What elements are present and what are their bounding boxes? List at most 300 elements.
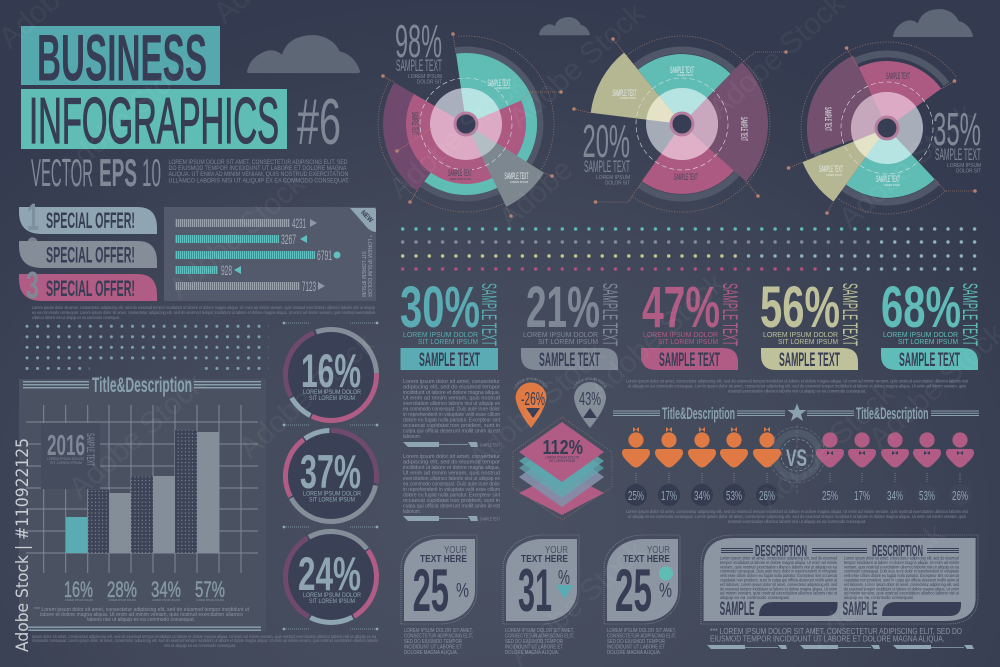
segment labels: LOREM IPSUM <box>884 183 900 187</box>
description column 1 <box>720 556 838 600</box>
description column 2: aliquip ex ea commodo consequat. <box>844 595 914 600</box>
subtitle: EPS <box>99 152 137 195</box>
icon: cloud left <box>247 35 360 73</box>
stat 56%: LOREM IPSUM DOLOR <box>763 332 838 339</box>
vertical note: SIT LOREM IPSUM <box>360 251 366 297</box>
chart note: labore et dolore magna aliqua. Ut enim ad minim veniam, quis nostrud exercitation ullamco <box>40 612 243 618</box>
comparison text top <box>626 378 968 394</box>
small text strip bottom: commodo consequat. Lorem ipsum dolor sit amet, consectetur adipiscing elit, sed do eiusmod tempor incididunt ut labore et dolore magna aliqua. Ut enim ad minim veniam, quis nostrud exercitation ullamco laboris <box>32 638 379 643</box>
watermarks: Adobe Stock <box>803 516 952 655</box>
paragraph 1: in reprehenderit in voluptate velit esse cillum <box>403 412 500 418</box>
35% label: LOREM IPSUM <box>947 163 981 169</box>
heading row <box>613 404 979 423</box>
description column 1: aliquip ex ea commodo consequat. <box>720 595 790 600</box>
20% label <box>582 115 631 186</box>
figure connectors <box>636 473 960 483</box>
paragraph 2 <box>403 454 500 515</box>
dot rows <box>401 224 980 274</box>
description column 2: veniam, quis nostrud exercitation ullamco laboris nisi ut aliquip ex ea <box>844 564 959 569</box>
rose chart 98%: SAMPLE TEXT <box>396 56 442 75</box>
card caption: LOREM IPSUM DOLOR SIT AMET, <box>404 628 473 634</box>
rose chart 20% <box>572 20 788 228</box>
donut 16%: 16% <box>301 344 361 397</box>
panel: bar list <box>164 207 376 301</box>
percentage badges: 26% <box>759 488 775 503</box>
stat 21%: SIT LOREM IPSUM <box>538 339 598 346</box>
figure 5 <box>946 432 974 468</box>
watermarks: Adobe Stock <box>753 376 902 515</box>
description column 2: tempor incididunt ut labore et dolore magna aliqua. Ut enim ad minim <box>844 560 959 565</box>
rose chart 98% <box>378 15 563 218</box>
donut 37% <box>268 413 394 539</box>
percentage badges <box>625 484 971 506</box>
percentage badges: 53% <box>726 488 742 503</box>
bar labels: 16% <box>64 577 93 602</box>
banner 2: SPECIAL OFFER! <box>46 242 135 268</box>
description column 1: tempor incididunt ut labore et dolore magna aliqua. Ut enim ad minim <box>720 560 837 565</box>
layered diamond 112%: LOREM IPSUM DOLOR <box>545 456 579 460</box>
title: business: BUSINESS <box>37 20 207 94</box>
paragraph 2: Ut enim ad minim veniam, quis nostrud <box>403 470 500 476</box>
bar labels: LOREM IPSUM DOLOR <box>196 598 224 602</box>
year label: SIT LOREM IPSUM <box>50 461 82 465</box>
percentage badges: 17% <box>854 488 870 503</box>
banner 3: 3 <box>26 265 39 307</box>
stat 47%: 47% <box>642 275 720 340</box>
watermarks: Adobe Stock <box>833 96 982 235</box>
paragraph 1: exercitation ullamco laboris nisi ut aliquip ex <box>403 401 500 407</box>
clouds <box>247 9 973 73</box>
donut 24%: 24% <box>298 547 361 600</box>
vertical note <box>360 235 372 297</box>
segment labels: LOREM IPSUM DOLOR <box>449 177 472 181</box>
figure 1 <box>816 432 844 468</box>
donut connectors <box>283 322 378 630</box>
year label <box>41 423 100 489</box>
description column 1: cupidatat non proident, sunt in culpa qui officia deserunt mollit anim id <box>720 578 837 582</box>
title: business <box>21 20 220 94</box>
bar 3267: 3267 <box>281 231 296 247</box>
bar labels <box>64 577 225 602</box>
stat 68%: SIT LOREM IPSUM <box>898 339 958 346</box>
comparison text bottom: nostrud exercitation ullamco laboris nisi ut aliquip ex ea commodo consequat. <box>728 519 866 525</box>
paragraph 1: occaecat cupidatat non proident, sunt in <box>403 423 500 429</box>
icon: cloud right <box>893 9 973 37</box>
orange figures <box>622 427 781 468</box>
donut 16%: LOREM IPSUM DOLOR <box>303 390 362 396</box>
segment labels: SAMPLE TEXT <box>670 65 694 75</box>
rose chart 35%: SAMPLE TEXT <box>886 71 910 81</box>
banner 1: SPECIAL OFFER! <box>46 208 135 233</box>
description column 1: do eiusmod tempor incididunt ut labore et dolore magna aliqua. Ut enim <box>720 586 837 591</box>
VS badge <box>765 425 829 495</box>
card 31% <box>503 535 579 656</box>
card caption: SED DO EIUSMOD TEMPOR <box>505 639 563 645</box>
paragraph 2: laborum. <box>403 509 421 515</box>
segment labels: SAMPLE TEXT <box>823 107 833 131</box>
stat 47%: LOREM IPSUM DOLOR <box>643 332 718 339</box>
paragraph 1: dolore eu fugiat nulla pariatur. Excepteur sint <box>403 418 500 424</box>
divider 1: SAMPLE TEXT <box>480 442 500 448</box>
segment labels: LOREM IPSUM <box>510 180 528 184</box>
description column 2: Lorem ipsum dolor sit amet, consectetur adipiscing elit, sed do eiusmod <box>844 556 959 560</box>
35% label: DOLOR SIT <box>956 168 982 174</box>
figure 3 <box>688 427 716 468</box>
chart note: laboris nisi ut aliquip ex ea commodo consequat. <box>87 617 195 623</box>
segment labels <box>612 65 749 182</box>
bar 4231: 4231 <box>292 215 306 231</box>
card caption: INCIDIDUNT UT LABORE ET <box>505 644 564 650</box>
segment labels: SAMPLE TEXT <box>612 88 637 98</box>
paragraph 1: Lorem ipsum dolor sit amet, consectetur <box>403 379 500 385</box>
sample label 2 <box>842 599 961 620</box>
description headings <box>721 543 959 560</box>
card 25% with dot: YOUR <box>647 545 670 556</box>
stat 47% <box>641 275 741 371</box>
title: infographics: INFOGRAPHICS <box>29 84 279 157</box>
stat 30%: SAMPLE TEXT <box>477 283 500 346</box>
small text strip bottom: ipsum dolor sit amet, consectetur adipiscing elit, sed do eiusmod tempor incididunt ut labore et dolore magna aliqua. Ut enim ad minim veniam, quis nostrud exercitation ullamco laboris nisi ut aliquip ex ea <box>32 634 376 639</box>
bar 928 <box>175 262 241 278</box>
bar 3267 <box>175 231 307 247</box>
intro text: ALIQUA. UT ENIM AD MINIM VENIAM, QUIS NOSTRUD EXERCITATION <box>168 171 348 178</box>
stat 30% <box>400 275 500 371</box>
panel: bar chart <box>19 374 266 631</box>
heading right <box>807 405 979 423</box>
card 25% with dot: % <box>659 580 672 602</box>
stat 56%: SIT LOREM IPSUM <box>778 339 838 346</box>
segment labels: LOREM IPSUM <box>494 86 510 90</box>
small text strip: ex ea commodo consequat. Lorem ipsum dolor sit amet, consectetur adipiscing elit, sed do eiusmod tempor incididunt ut labore et dolore magna aliqua. Ut enim ad minim veniam, quis nostrud exercitation <box>32 310 375 315</box>
percentage badges: 25% <box>628 488 644 503</box>
new corner tag <box>350 208 376 232</box>
watermarks: Adobe Stock <box>583 266 732 405</box>
pin -26% <box>514 378 548 428</box>
card caption: DOLORE MAGNA ALIQUA. <box>607 650 661 656</box>
banner 2: 2 <box>26 231 39 273</box>
card 25%: YOUR <box>444 545 467 556</box>
description column 2: velit esse cillum dolore eu fugiat nulla pariatur. Excepteur sint occaecat <box>844 573 960 578</box>
banner 3: SPECIAL OFFER! <box>46 276 135 301</box>
figure 4 <box>913 432 941 468</box>
leaders <box>788 48 975 213</box>
35% label <box>933 103 982 174</box>
small text strip: Lorem ipsum dolor sit amet, consectetur adipiscing elit, sed do eiusmod tempor incididunt ut labore et dolore magna aliqua. Ut enim ad minim veniam, quis nostrud exercitation ullamco laboris nisi ut aliquip <box>32 305 375 310</box>
rose chart 98%: SAMPLE TEXT <box>504 171 529 181</box>
vertical note: * LOREM IPSUM DOLOR <box>366 235 372 297</box>
stat 30%: LOREM IPSUM DOLOR <box>403 332 478 339</box>
description column 2: ad minim veniam, quis nostrud exercitation ullamco laboris nisi ut <box>844 591 960 596</box>
figure 1 <box>622 427 650 468</box>
stat 21%: SAMPLE TEXT <box>539 350 600 371</box>
stat 21% <box>521 275 621 371</box>
watermarks: Adobe Stock <box>503 0 652 135</box>
stat 68%: SAMPLE TEXT <box>958 283 981 346</box>
banner 1: 1 <box>27 197 39 239</box>
description column 1: commodo consequat. Duis aute irure dolor in reprehenderit in voluptate <box>720 569 837 574</box>
segment labels: SAMPLE TEXT <box>488 78 511 88</box>
stat 21%: 21% <box>526 275 600 340</box>
bar 6791 <box>175 247 340 263</box>
leaders <box>574 39 786 202</box>
pin -26%: LOREM IPSUM DOLOR SIT AMET <box>514 378 548 389</box>
bar labels: 28% <box>107 577 137 602</box>
percentage badges: 25% <box>822 488 838 503</box>
small text strip <box>32 305 375 320</box>
donut 37%: 37% <box>300 445 361 498</box>
paragraph 1: culpa qui officia deserunt mollit anim id est <box>403 428 500 434</box>
bar 7123 <box>175 278 325 294</box>
description column 1: velit esse cillum dolore eu fugiat nulla pariatur. Excepteur sint occaecat <box>720 573 838 578</box>
footer note: EIUSMOD TEMPOR INCIDIDUNT UT LABORE ET DOLORE MAGNA ALIQUA. <box>710 634 944 644</box>
segment labels <box>410 78 529 184</box>
VS badge: VS <box>786 445 807 472</box>
description column 1: ad minim veniam, quis nostrud exercitation ullamco laboris nisi ut <box>720 591 838 596</box>
paragraph 1 <box>403 379 500 440</box>
paragraph 2: ea commodo consequat. Duis aute irure dolor <box>403 482 500 488</box>
donut 16%: SIT LOREM IPSUM <box>309 396 355 402</box>
watermarks: Adobe Stock <box>163 166 312 305</box>
left text column <box>403 379 500 522</box>
chart note: *** Lorem ipsum dolor sit amet, consectetur adipiscing elit, sed do eiusmod tempor incididunt ut <box>34 607 249 613</box>
98% label: DOLOR SIT <box>417 80 443 86</box>
stat 30%: SIT LOREM IPSUM <box>418 339 478 346</box>
20% label: LOREM IPSUM <box>596 175 630 181</box>
card caption: CONSECTETUR ADIPISCING ELIT, <box>607 634 676 640</box>
paragraph 1: incididunt ut labore et dolore magna aliqua. <box>403 390 500 396</box>
paragraph 2: in reprehenderit in voluptate velit esse cillum <box>403 487 500 493</box>
rose chart 35% <box>782 23 992 233</box>
donut 24% <box>267 513 395 641</box>
intro text: LOREM IPSUM DOLOR SIT AMET, CONSECTETUR ADIPISCING ELIT, SED <box>168 159 348 166</box>
paragraph 2: culpa qui officia deserunt mollit anim id est <box>403 504 500 510</box>
card caption: SED DO EIUSMOD TEMPOR <box>607 639 665 645</box>
card 25% with dot: 25 <box>615 557 652 624</box>
card caption: DOLORE MAGNA ALIQUA. <box>505 650 559 656</box>
segment labels: SAMPLE TEXT <box>410 112 420 135</box>
description headings: DESCRIPTION <box>755 543 807 560</box>
description column 2: est laborum. Lorem ipsum dolor sit amet, consectetur adipiscing elit, sed <box>844 582 959 587</box>
intro text <box>168 159 350 184</box>
segment labels: SAMPLE TEXT <box>674 172 698 182</box>
small text strip bottom: nisi ut aliquip ex ea commodo consequat. <box>164 643 236 648</box>
card caption: LOREM IPSUM DOLOR SIT AMET, <box>505 628 574 634</box>
divider 2 <box>403 516 500 522</box>
stock credit: Adobe Stock | #110922125 <box>13 438 33 652</box>
banner 3 <box>19 265 157 307</box>
percentage badges: 34% <box>887 488 903 503</box>
icon: cloud middle <box>539 17 590 35</box>
card caption: CONSECTETUR ADIPISCING ELIT, <box>404 634 473 640</box>
dot grid left <box>26 321 268 374</box>
bar 4231 <box>175 215 317 231</box>
watermarks: Adobe Stock <box>233 326 382 465</box>
card 25%: % <box>456 580 469 602</box>
card 31%: TEXT HERE <box>521 554 568 565</box>
footer dividers <box>707 645 974 649</box>
donut 24%: LOREM IPSUM DOLOR <box>303 593 362 599</box>
pin 43% <box>572 378 606 428</box>
stat 21%: LOREM IPSUM DOLOR <box>523 332 598 339</box>
magenta figures <box>816 432 974 468</box>
segment labels: LOREM IPSUM <box>826 173 842 177</box>
title block: 10 <box>142 152 161 195</box>
watermarks: Adobe Stock <box>463 336 612 475</box>
paragraph 2: adipiscing elit, sed do eiusmod tempor <box>403 460 500 466</box>
card caption: SED DO EIUSMOD TEMPOR <box>404 639 462 645</box>
stat 56% <box>760 275 861 371</box>
paragraph 2: Lorem ipsum dolor sit amet, consectetur <box>403 454 500 460</box>
description column 1: veniam, quis nostrud exercitation ullamco laboris nisi ut aliquip ex ea <box>720 564 837 569</box>
pin 43%: 43% <box>579 389 601 409</box>
card 25% <box>401 535 477 656</box>
figure 3 <box>881 432 909 468</box>
card caption: DOLORE MAGNA ALIQUA. <box>404 650 458 656</box>
percentage badges: 17% <box>661 488 677 503</box>
sample label 1 <box>720 599 838 620</box>
bar 928: 928 <box>221 262 232 278</box>
percentage badges: 26% <box>952 488 968 503</box>
card 25%: 25 <box>413 557 449 624</box>
card 25% with dot <box>604 535 680 656</box>
stat 56%: SAMPLE TEXT <box>838 283 861 346</box>
subtitle: VECTOR <box>31 152 93 195</box>
segment labels: SAMPLE TEXT <box>819 164 843 174</box>
card 25%: TEXT HERE <box>420 554 467 565</box>
card 25% with dot: TEXT HERE <box>623 554 670 565</box>
paragraph 2: occaecat cupidatat non proident, sunt in <box>403 498 500 504</box>
stat 56%: SAMPLE TEXT <box>779 350 840 371</box>
title number: #6 <box>297 85 341 158</box>
donut 24%: SIT LOREM IPSUM <box>309 599 355 605</box>
description column 2: do eiusmod tempor incididunt ut labore et dolore magna aliqua. Ut enim <box>844 586 959 591</box>
watermarks: Adobe Stock <box>53 46 202 185</box>
title block <box>21 20 350 195</box>
card caption: INCIDIDUNT UT LABORE ET <box>607 644 666 650</box>
sample label 1: SAMPLE <box>720 599 755 620</box>
paragraph 2: exercitation ullamco laboris nisi ut aliquip ex <box>403 476 500 482</box>
card caption: LOREM IPSUM DOLOR SIT AMET, <box>607 628 676 634</box>
banner 2 <box>19 231 157 273</box>
stat 56%: 56% <box>760 275 840 340</box>
stat 21%: SAMPLE TEXT <box>598 283 621 346</box>
paragraph 2: incididunt ut labore et dolore magna aliqua. <box>403 465 500 471</box>
98% label: 98% <box>395 15 442 67</box>
donut 16% <box>269 313 393 437</box>
title: infographics <box>21 84 287 157</box>
pin -26%: -26% <box>521 389 545 409</box>
card 31%: % <box>558 567 570 589</box>
stat 47%: SAMPLE TEXT <box>718 283 741 346</box>
description column 1: Lorem ipsum dolor sit amet, consectetur adipiscing elit, sed do eiusmod <box>720 556 837 560</box>
new corner tag: NEW <box>359 209 374 225</box>
stat 47%: SAMPLE TEXT <box>659 350 720 371</box>
card caption: INCIDIDUNT UT LABORE ET <box>404 644 463 650</box>
20% label: 20% <box>582 115 630 167</box>
small text strip: ullamco laboris nisi ut aliquip ex ea commodo consequat. <box>32 315 120 320</box>
98% label: LOREM IPSUM <box>408 74 442 80</box>
segment labels: SAMPLE TEXT <box>739 117 749 141</box>
bar 7123: 7123 <box>302 278 316 294</box>
chart heading: Title&Description <box>92 374 192 397</box>
layered diamond 112%: SIT LOREM IPSUM <box>549 459 575 463</box>
figure 2 <box>848 432 876 468</box>
bar labels: LOREM IPSUM DOLOR <box>108 598 136 602</box>
layered diamond 112% <box>513 417 612 520</box>
footer note <box>710 626 962 644</box>
20% label: DOLOR SIT <box>605 180 631 186</box>
stat 47%: SIT LOREM IPSUM <box>658 339 718 346</box>
bar labels: 34% <box>151 577 181 602</box>
sample label 2: SAMPLE <box>842 599 878 620</box>
description column 2: cupidatat non proident, sunt in culpa qui officia deserunt mollit anim id <box>844 578 959 582</box>
watermarks: Adobe Stock <box>383 66 532 205</box>
bar labels: LOREM IPSUM DOLOR <box>65 598 93 602</box>
heading left: Title&Description <box>662 405 735 423</box>
paragraph 1: Ut enim ad minim veniam, quis nostrud <box>403 396 500 402</box>
rose chart 20%: SAMPLE TEXT <box>584 157 630 176</box>
layered diamond 112%: 112% <box>542 437 583 459</box>
description column 1: est laborum. Lorem ipsum dolor sit amet, consectetur adipiscing elit, sed <box>720 582 837 587</box>
segment labels: LOREM IPSUM <box>620 96 636 100</box>
small text strip bottom <box>32 634 379 648</box>
card caption <box>404 628 473 656</box>
bars <box>66 430 219 553</box>
percentage badges: 53% <box>919 488 935 503</box>
percentage badges: 34% <box>694 488 710 503</box>
donut 37%: SIT LOREM IPSUM <box>309 498 355 504</box>
watermarks: Adobe Stock <box>63 366 212 505</box>
card 31%: YOUR <box>545 545 568 556</box>
card caption <box>505 628 574 656</box>
stat 68% <box>881 275 981 371</box>
bar labels: LOREM IPSUM DOLOR <box>152 598 180 602</box>
description headings: DESCRIPTION <box>872 543 923 560</box>
figure 5 <box>753 427 781 468</box>
chart note <box>34 607 249 623</box>
bar 6791: 6791 <box>317 247 332 263</box>
figure 2 <box>655 427 683 468</box>
bar labels: 57% <box>195 577 225 602</box>
year label: SAMPLE TEXT <box>84 433 96 466</box>
pin 43%: LOREM IPSUM DOLOR SIT AMET <box>572 378 606 389</box>
98% label <box>395 15 443 86</box>
divider 2: SAMPLE TEXT <box>480 516 500 522</box>
intro text: ULLAMCO LABORIS NISI UT ALIQUIP EX EA COMMODO CONSEQUAT. <box>168 177 350 184</box>
segment labels: LOREM IPSUM <box>677 73 693 77</box>
icon: star <box>788 404 806 421</box>
year label: LOREM IPSUM DOLOR <box>47 457 84 461</box>
special offer banners <box>19 197 157 307</box>
stat 30%: SAMPLE TEXT <box>419 350 480 371</box>
stat 68%: LOREM IPSUM DOLOR <box>883 332 958 339</box>
intro text: DO EIUSMOD TEMPOR INCIDIDUNT UT LABORE ET DOLORE MAGNA <box>168 165 347 172</box>
leaders <box>383 34 561 216</box>
grid <box>26 405 258 573</box>
paragraph 1: laborum. <box>403 434 421 440</box>
panel: description <box>701 535 978 624</box>
description column 2 <box>844 556 960 600</box>
card caption: CONSECTETUR ADIPISCING ELIT, <box>505 634 574 640</box>
segment labels: SAMPLE TEXT <box>876 174 900 184</box>
year label: 2016 <box>47 430 85 462</box>
heading right: Title&Description <box>856 405 928 423</box>
comparison text top: nostrud exercitation ullamco laboris nisi ut aliquip ex ea commodo consequat. <box>728 388 866 394</box>
paragraph 1: adipiscing elit, sed do eiusmod tempor <box>403 384 500 390</box>
segment labels <box>819 71 910 187</box>
comparison text bottom <box>626 509 968 525</box>
watermarks: Adobe <box>493 153 579 235</box>
